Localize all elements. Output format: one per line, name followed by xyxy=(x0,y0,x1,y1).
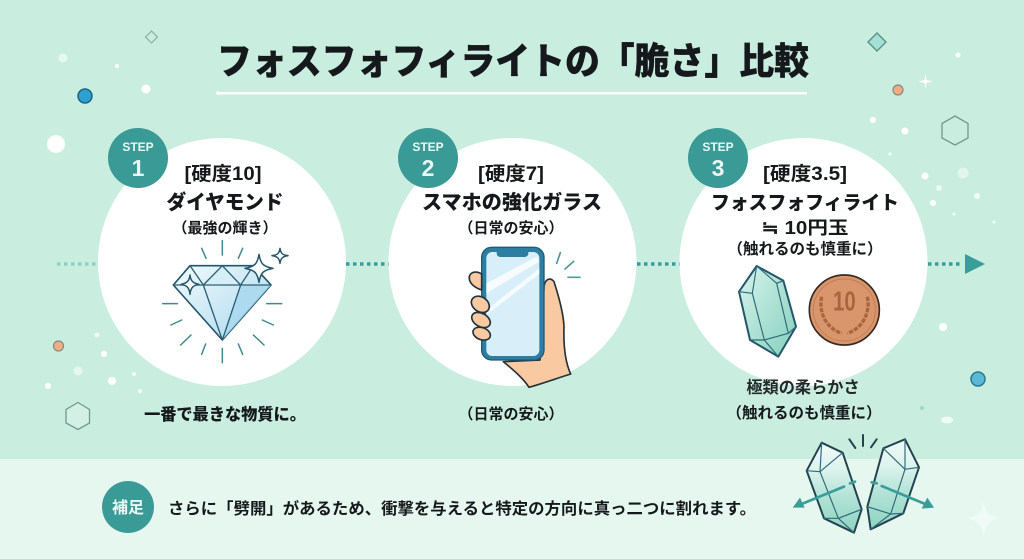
step 2 badge: 2 xyxy=(422,155,434,181)
step 2 heading: [硬度7] xyxy=(478,163,544,185)
dotted connector arrow xyxy=(57,254,985,274)
step 1 badge: 1 xyxy=(132,155,145,181)
step 3 heading: フォスフォフィライト xyxy=(711,193,899,214)
step 3 heading xyxy=(711,163,899,258)
step 3 caption: 極類の柔らかさ xyxy=(746,378,860,397)
panel: step 3 phosphophyllite and coin xyxy=(680,128,928,422)
step 3 badge: 3 xyxy=(712,155,724,181)
icon: split crystal with arrows xyxy=(793,435,934,533)
step 2 badge xyxy=(398,128,458,188)
step 3 heading: ≒ 10円玉 xyxy=(762,218,848,238)
step 3 caption xyxy=(726,378,882,422)
step 3 badge xyxy=(688,128,748,188)
note text: さらに「劈開」があるため、衝撃を与えると特定の方向に真っ二つに割れます。 xyxy=(168,499,756,518)
title: フォスフォフィライトの「脆さ」比較 xyxy=(217,41,809,82)
icon: ten yen coin: 10 xyxy=(833,286,856,317)
step 2 heading xyxy=(422,163,602,237)
decorative sparkle xyxy=(966,500,1001,536)
panel: step 1 diamond xyxy=(98,128,346,424)
panel: step 2 smartphone xyxy=(388,128,636,423)
step 2 heading: （日常の安心） xyxy=(458,219,564,237)
step 1 heading: [硬度10] xyxy=(184,163,262,185)
step 3 heading: [硬度3.5] xyxy=(763,163,847,185)
step 3 heading: （触れるのも慎重に） xyxy=(727,240,883,258)
icon: diamond xyxy=(163,241,288,363)
step 1 heading: ダイヤモンド xyxy=(166,190,284,214)
step 1 badge: STEP xyxy=(122,140,154,154)
step 1 heading: （最強の輝き） xyxy=(172,220,278,237)
note: supplement badge xyxy=(102,481,154,533)
icon: phosphophyllite crystal xyxy=(739,266,796,357)
bottom note band xyxy=(0,459,1024,559)
step 1 caption: 一番で最きな物質に。 xyxy=(144,405,306,424)
step 2 caption: （日常の安心） xyxy=(458,405,564,423)
icon: ten yen coin xyxy=(809,275,879,345)
icon: hand holding smartphone xyxy=(468,247,580,387)
note: supplement badge: 補足 xyxy=(112,499,144,517)
step 1 badge xyxy=(108,128,168,188)
step 1 heading xyxy=(166,163,284,237)
step 3 badge: STEP xyxy=(702,140,734,154)
step 2 badge: STEP xyxy=(412,140,444,154)
step 2 heading: スマホの強化ガラス xyxy=(422,190,602,214)
step 3 caption: （触れるのも慎重に） xyxy=(726,404,882,422)
decorative particles xyxy=(45,31,996,430)
